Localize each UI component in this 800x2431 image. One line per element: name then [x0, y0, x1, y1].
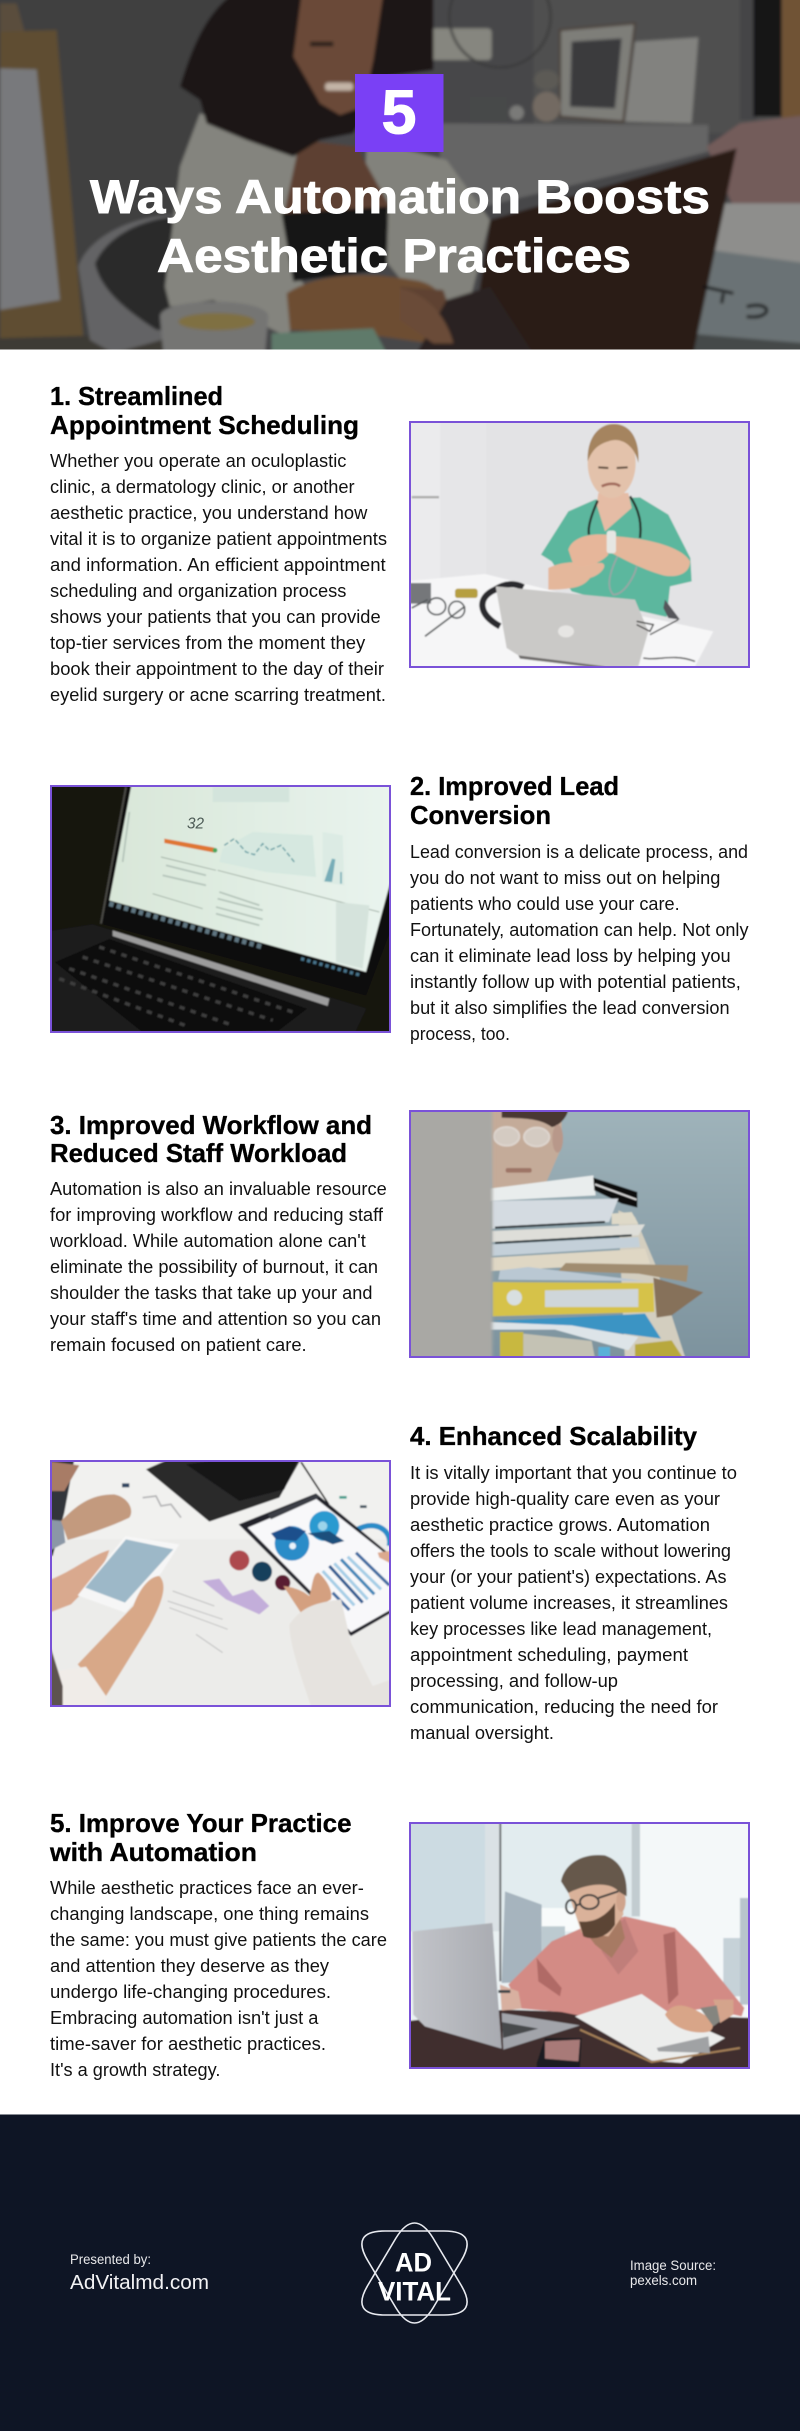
body text 5 — [50, 1878, 387, 2080]
body text 3: remain focused on patient care. — [50, 1335, 307, 1355]
stethoscope — [589, 496, 641, 538]
pie charts — [275, 1526, 309, 1561]
image source credit: Image Source: — [630, 2258, 716, 2273]
body text 4: provide high-quality care even as your — [410, 1489, 720, 1509]
heading 2 — [410, 771, 619, 830]
heading 4: 4. Enhanced Scalability — [410, 1421, 698, 1451]
hair — [180, 0, 433, 157]
table — [405, 2010, 755, 2073]
photo: man behind stack of folders — [402, 1104, 755, 1365]
body text 5: undergo life-changing procedures. — [50, 1982, 331, 2002]
right hand and watch — [665, 2005, 713, 2032]
headphones — [482, 584, 523, 626]
logo: AD VITAL: VITAL — [378, 2276, 451, 2306]
body text 2 — [410, 842, 748, 1044]
footer panel — [0, 2114, 800, 2431]
body text 4: key processes like lead management, — [410, 1619, 712, 1639]
body text 4: processing, and follow-up — [410, 1671, 618, 1691]
neck and face — [585, 1911, 625, 1958]
laptop — [146, 1456, 303, 1522]
hero title: Ways Automation Boosts — [90, 170, 710, 223]
badge: number 5 — [355, 74, 444, 152]
shirt — [508, 1916, 744, 2016]
heading 3 — [50, 1110, 372, 1168]
bar stripes — [323, 1553, 389, 1610]
shirt — [165, 113, 313, 337]
heading 2: 2. Improved Lead — [410, 771, 619, 801]
shirt behind stack — [618, 1210, 687, 1362]
body text 1: vital it is to organize patient appointments — [50, 529, 387, 549]
photo: laptop analytics dashboard — [46, 782, 396, 1037]
heading 5: 5. Improve Your Practice — [50, 1808, 352, 1838]
presented by credit — [70, 2252, 209, 2294]
body text 1 — [50, 451, 387, 705]
hero background photo: woman at laptop — [0, 0, 800, 357]
heading 1: Appointment Scheduling — [50, 410, 359, 440]
document — [575, 1994, 725, 2063]
arm and hand — [287, 275, 449, 343]
dashboard number: 32 — [187, 816, 205, 833]
body text 3: Automation is also an invaluable resource — [50, 1179, 387, 1199]
tablet and hands — [51, 1550, 109, 1612]
logo: AD VITAL — [362, 2223, 467, 2323]
body text 5: and attention they deserve as they — [50, 1956, 329, 1976]
body text 1: scheduling and organization process — [50, 581, 346, 601]
hero title: Aesthetic Practices — [157, 229, 631, 282]
body text 1: top-tier services from the moment they — [50, 633, 365, 653]
phone — [537, 2038, 582, 2068]
right hand and sleeve — [283, 1573, 331, 1615]
body text 1: shows your patients that you can provide — [50, 607, 381, 627]
body text 5: It's a growth strategy. — [50, 2060, 220, 2080]
body text 4: offers the tools to scale without lowering — [410, 1541, 731, 1561]
body text 1: and information. An efficient appointment — [50, 555, 386, 575]
laptop — [496, 586, 648, 668]
section 1: streamlined appointment scheduling — [50, 381, 755, 705]
body text 5: changing landscape, one thing remains — [50, 1904, 369, 1924]
body text 5: While aesthetic practices face an ever- — [50, 1878, 364, 1898]
photo: team reviewing charts on desk — [46, 1456, 396, 1711]
shelf items — [425, 28, 492, 60]
hands — [500, 1985, 522, 2011]
face — [293, 0, 383, 115]
body text 5: Embracing automation isn't just a — [50, 2008, 319, 2028]
heading 1: 1. Streamlined — [50, 381, 223, 411]
laptop base — [46, 925, 366, 1037]
section 2: improved lead conversion — [46, 771, 748, 1044]
body text 1: book their appointment to the day of their — [50, 659, 384, 679]
section 3: improved workflow — [49, 1104, 755, 1365]
body text 4: appointment scheduling, payment — [410, 1645, 688, 1665]
body text 2: but it also simplifies the lead conversion — [410, 998, 730, 1018]
body text 2: process, too. — [410, 1024, 510, 1044]
taskbar icons — [109, 904, 263, 947]
presented by credit: Presented by: — [70, 2252, 151, 2267]
body text 4: aesthetic practice grows. Automation — [410, 1515, 710, 1535]
body text 1: eyelid surgery or acne scarring treatment. — [50, 685, 386, 705]
arms — [608, 536, 690, 576]
photo: man working at laptop in office — [405, 1818, 755, 2073]
logo: AD VITAL: AD — [395, 2248, 432, 2278]
section 5: improve your practice — [49, 1808, 755, 2080]
faint notes — [143, 1496, 181, 1518]
torso — [541, 497, 692, 617]
body text 1: aesthetic practice, you understand how — [50, 503, 368, 523]
presented by credit: AdVitalmd.com — [70, 2272, 209, 2294]
laptop — [470, 148, 737, 353]
badge: number 5: 5 — [382, 78, 416, 148]
cup — [160, 302, 268, 353]
foreground blurred column — [411, 1112, 494, 1356]
body text 4: manual oversight. — [410, 1723, 554, 1743]
body text 3: shoulder the tasks that take up your and — [50, 1283, 372, 1303]
body text 4 — [410, 1463, 737, 1743]
body text 3: workload. While automation alone can't — [49, 1231, 366, 1251]
body text 3: your staff's time and attention so you can — [50, 1309, 381, 1329]
heading 3: 3. Improved Workflow and — [50, 1110, 372, 1140]
body text 1: Whether you operate an oculoplastic — [50, 451, 346, 471]
laptop — [412, 1923, 502, 2049]
folders stack — [489, 1175, 596, 1201]
body text 3: eliminate the possibility of burnout, it can — [50, 1257, 378, 1277]
image source credit — [630, 2258, 716, 2288]
body text 2: Lead conversion is a delicate process, and — [410, 842, 748, 862]
body text 2: can it eliminate lead loss by helping you — [410, 946, 731, 966]
hero title — [90, 170, 710, 282]
body text 1: clinic, a dermatology clinic, or another — [50, 477, 355, 497]
heading 1 — [50, 381, 359, 440]
body text 5: time-saver for aesthetic practices. — [50, 2034, 326, 2054]
face — [490, 1110, 562, 1190]
photo: doctor checking watch — [405, 418, 755, 673]
heading 2: Conversion — [410, 800, 551, 830]
body text 5: the same: you must give patients the care — [50, 1930, 387, 1950]
body text 4: your (or your patient's) expectations. As — [410, 1567, 726, 1587]
chair — [78, 215, 173, 353]
image source credit: pexels.com — [630, 2273, 697, 2288]
body text 4: communication, reducing the need for — [410, 1697, 718, 1717]
heading 5 — [49, 1808, 352, 1867]
head — [587, 439, 636, 494]
body text 3 — [49, 1179, 387, 1355]
hero banner — [0, 0, 800, 357]
far chart — [358, 1526, 390, 1546]
heading 3: Reduced Staff Workload — [50, 1138, 347, 1168]
glasses — [412, 598, 465, 636]
desk chart and dots — [203, 1579, 269, 1614]
body text 2: Fortunately, automation can help. Not only — [410, 920, 748, 940]
section 4: enhanced scalability — [46, 1421, 737, 1743]
clipboard — [239, 1493, 396, 1636]
body text 2: you do not want to miss out on helping — [410, 868, 720, 888]
body text 4: patient volume increases, it streamlines — [410, 1593, 728, 1613]
body text 2: patients who could use your care. — [410, 894, 680, 914]
body text 3: for improving workflow and reducing staff — [50, 1205, 384, 1225]
heading 5: with Automation — [49, 1837, 257, 1867]
body text 4: It is vitally important that you continue to — [410, 1463, 737, 1483]
body text 2: instantly follow up with potential patients, — [410, 972, 741, 992]
